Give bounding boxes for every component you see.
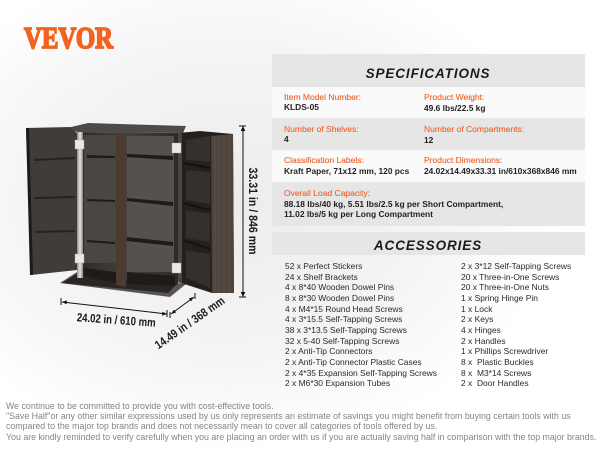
spec: dimensions: 24.02x14.49x33.31 in/610x368x846 mm xyxy=(424,166,577,176)
accessories list: left column: 8 x 8*30 Wooden Dowel Pins xyxy=(285,293,394,303)
accessories list: left column: 4 x M4*15 Round Head Screws xyxy=(285,304,403,314)
dimension: width: 24.02 in / 610 mm xyxy=(76,310,156,330)
left door xyxy=(26,127,77,275)
accessories list: left column: 2 x 4*35 Expansion Self-Tapping Screws xyxy=(285,368,437,378)
center divider xyxy=(116,133,126,287)
footer disclaimer: compared to the major top brands and does not necessarily mean to cover all categories of tools offered by us. xyxy=(6,421,437,431)
accessories list: right column: 20 x Three-in-One Nuts xyxy=(461,282,549,292)
accessories list: right column: 2 x Handles xyxy=(461,336,506,346)
accessories list: right column: 4 x Hinges xyxy=(461,325,501,335)
right door xyxy=(178,131,234,293)
hinges xyxy=(75,140,181,273)
cabinet base xyxy=(60,272,186,297)
cabinet top xyxy=(67,123,186,133)
dimension: height xyxy=(239,126,260,297)
accessories list: right column: 2 x Door Handles xyxy=(461,378,529,388)
accessories list: right column: 2 x Keys xyxy=(461,314,493,324)
footer disclaimer xyxy=(6,401,596,442)
accessories list: left column: 2 x Anti-Tip Connector Plastic Cases xyxy=(285,357,422,367)
silver pole xyxy=(77,132,83,278)
spec: load capacity: 11.02 lbs/5 kg per Long Compartment xyxy=(284,209,433,219)
accessories list: left column: 4 x 3*15.5 Self-Tapping Screws xyxy=(285,314,402,324)
spec: load capacity: 88.18 lbs/40 kg, 5.51 lbs/2.5 kg per Short Compartment, xyxy=(284,199,503,209)
spec: labels: Kraft Paper, 71x12 mm, 120 pcs xyxy=(284,166,410,176)
spec: model number: Item Model Number: xyxy=(284,92,361,102)
accessories list: left column: 2 x M6*30 Expansion Tubes xyxy=(285,378,390,388)
spec: dimensions: Product Dimensions: xyxy=(424,155,502,165)
spec: model number: KLDS-05 xyxy=(284,102,319,112)
spec: shelves: Number of Shelves: xyxy=(284,124,359,134)
wood grain xyxy=(215,135,229,293)
heading: specifications: SPECIFICATIONS xyxy=(366,66,490,81)
accessories list: right column: 2 x 3*12 Self-Tapping Screws xyxy=(461,261,571,271)
accessories list: left column: 32 x 5-40 Self-Tapping Screws xyxy=(285,336,399,346)
heading: accessories: ACCESSORIES xyxy=(373,238,482,253)
spec: labels: Classification Labels: xyxy=(284,155,364,165)
panel: specifications xyxy=(272,54,585,226)
footer disclaimer: "Save Half"or any other similar expressions used by us only represents an estimate of savings you might benefit from buying certain tools with us xyxy=(6,411,571,421)
cabinet interior xyxy=(77,132,178,285)
spec: labels xyxy=(284,155,410,176)
product image: cabinet xyxy=(26,123,234,297)
spec: shelves: 4 xyxy=(284,134,289,144)
footer disclaimer: We continue to be committed to provide you with cost-effective tools. xyxy=(6,401,274,411)
spec: load capacity xyxy=(284,188,503,219)
accessories list: left column: 24 x Shelf Brackets xyxy=(285,272,358,282)
right door shelves xyxy=(183,162,210,250)
compartments xyxy=(84,135,174,272)
spec: weight: 49.6 lbs/22.5 kg xyxy=(424,103,485,113)
spec: compartments: 12 xyxy=(424,135,434,145)
accessories list: left column: 38 x 3*13.5 Self-Tapping Screws xyxy=(285,325,407,335)
spec: model number xyxy=(284,92,361,112)
dimension: width xyxy=(61,298,167,330)
spec: dimensions xyxy=(424,155,577,176)
accessories list: right column xyxy=(461,261,571,388)
accessories list: right column: 20 x Three-in-One Screws xyxy=(461,272,559,282)
footer disclaimer: You are kindly reminded to verify carefully when you are placing an order with us if you are actually saving half in comparison with the top major brands. xyxy=(6,432,596,442)
dimension: height: 33.31 in / 846 mm xyxy=(246,168,260,254)
left door shelves xyxy=(34,157,75,233)
panel: accessories xyxy=(272,232,585,388)
spec: shelves xyxy=(284,124,359,144)
cabinet shelves xyxy=(84,154,175,286)
accessories list: right column: 8 x M3*14 Screws xyxy=(461,368,531,378)
spec: compartments: Number of Compartments: xyxy=(424,124,524,134)
logo: VEVOR: VEVOR xyxy=(24,20,113,55)
accessories list: left column: 52 x Perfect Stickers xyxy=(285,261,362,271)
accessories list: left column xyxy=(285,261,437,388)
spec: weight xyxy=(424,92,485,113)
spec: load capacity: Overall Load Capacity: xyxy=(284,188,370,198)
accessories heading band xyxy=(272,232,585,255)
accessories list: left column: 4 x 8*40 Wooden Dowel Pins xyxy=(285,282,394,292)
specifications heading band xyxy=(272,54,585,87)
accessories list: left column: 2 x Anti-Tip Connectors xyxy=(285,346,372,356)
spec: compartments xyxy=(424,124,524,145)
accessories list: right column: 1 x Phillips Screwdriver xyxy=(461,346,548,356)
accessories list: right column: 1 x Spring Hinge Pin xyxy=(461,293,538,303)
dimension: depth: 14.49 in / 368 mm xyxy=(152,293,227,352)
accessories list: right column: 1 x Lock xyxy=(461,304,493,314)
spec: weight: Product Weight: xyxy=(424,92,484,102)
accessories list: right column: 8 x Plastic Buckles xyxy=(461,357,534,367)
